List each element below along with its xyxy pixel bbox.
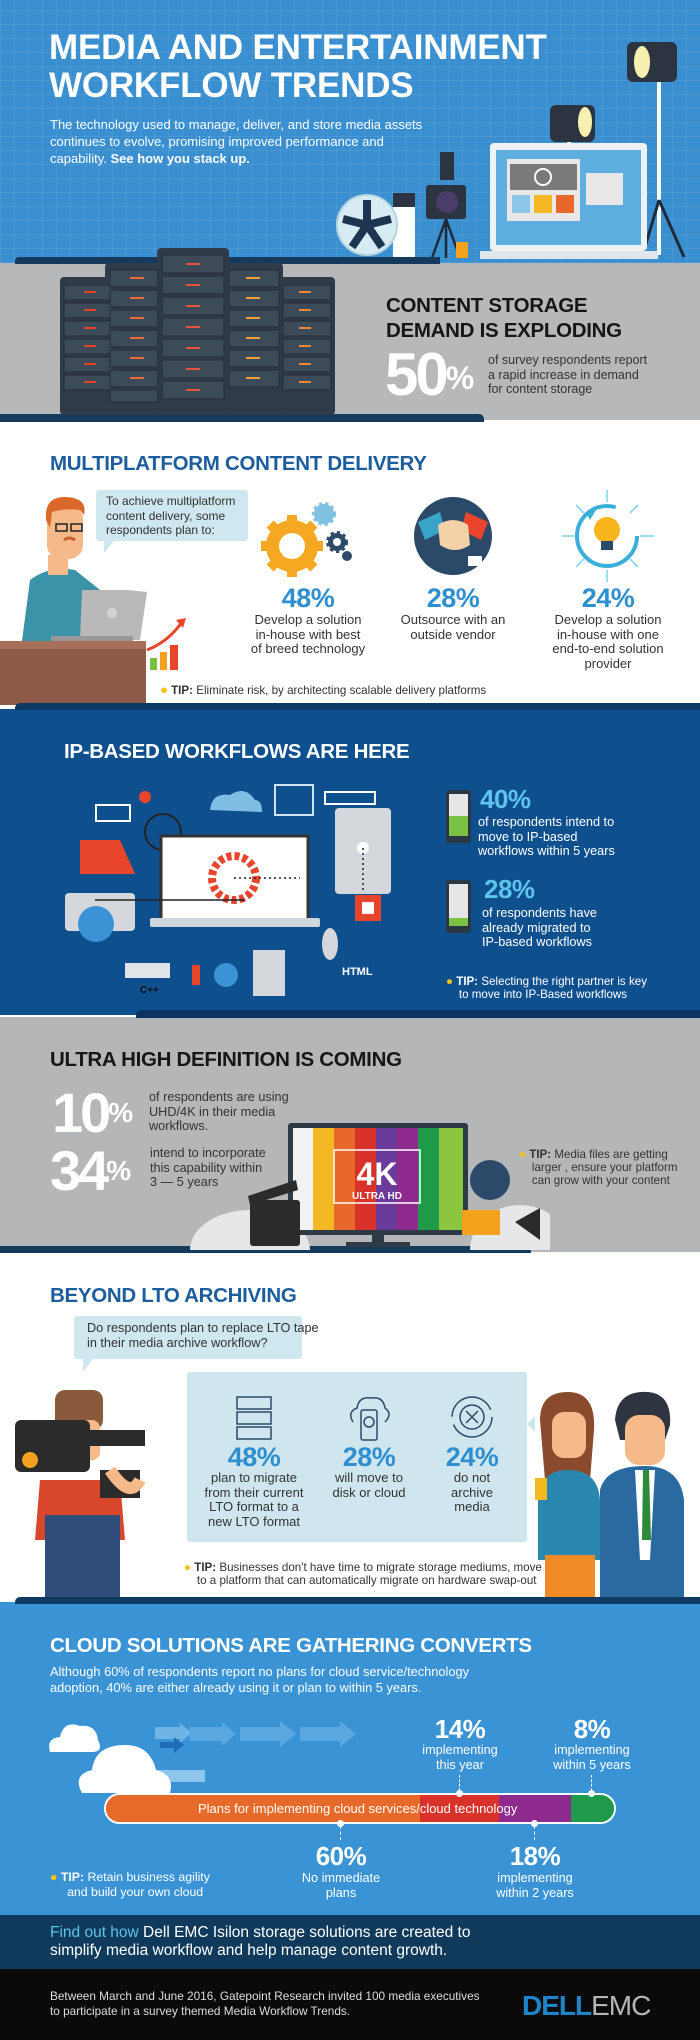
IP stat 40%: of respondents intend to xyxy=(478,815,614,829)
callout 18%: within 2 years xyxy=(496,1886,574,1900)
speech bubble: respondents plan to: xyxy=(106,523,215,537)
stat 28% xyxy=(332,1442,405,1500)
storage band xyxy=(0,263,700,420)
stat 24% xyxy=(446,1442,498,1514)
footer xyxy=(0,1969,700,2040)
stat 34% xyxy=(50,1139,266,1202)
stat: 48%: 48% xyxy=(282,583,334,613)
footer: Between March and June 2016, Gatepoint Research invited 100 media executives xyxy=(50,1989,480,2003)
stat 24%: archive xyxy=(451,1485,493,1500)
call to action band xyxy=(0,1915,700,1970)
tip: IP: ● TIP: Selecting the right partner is key xyxy=(446,975,647,988)
speech bubble: To achieve multiplatform xyxy=(106,494,235,508)
question bubble xyxy=(74,1316,302,1359)
callout 18%: 18% xyxy=(510,1841,560,1871)
callout 18%: implementing xyxy=(497,1871,573,1885)
tip: LTO xyxy=(184,1561,542,1587)
bar chart: cloud plans: Plans for implementing cloud services/cloud technology xyxy=(198,1801,517,1816)
callout 60%: plans xyxy=(326,1886,356,1900)
callout 14% xyxy=(422,1714,498,1797)
bar chart: cloud plans xyxy=(104,1793,616,1824)
stat: 28% xyxy=(401,583,505,642)
stat description: a rapid increase in demand xyxy=(488,368,639,382)
call to action band: Find out how Dell EMC Isilon storage solutions are created to xyxy=(50,1924,470,1941)
callout 8% xyxy=(553,1714,631,1797)
illustration: cameraman xyxy=(15,1359,146,1597)
callout 14%: this year xyxy=(436,1758,484,1772)
stat 28%: 28% xyxy=(343,1442,395,1472)
stat: 24%: provider xyxy=(585,656,631,671)
IP illustration: connected laptop: C++ xyxy=(140,985,159,996)
IP stat 40%: move to IP-based xyxy=(478,830,577,844)
stat 48%: from their current xyxy=(204,1485,303,1500)
tip: UHD: larger , ensure your platform xyxy=(532,1161,678,1174)
phone icon 2 xyxy=(446,880,471,933)
tip: LTO: ● TIP: Businesses don't have time to migrate storage mediums, move xyxy=(184,1561,542,1574)
tip: cloud: and build your own cloud xyxy=(67,1884,203,1898)
server racks illustration xyxy=(60,248,335,415)
stat 48%: 48% xyxy=(228,1442,280,1472)
stat 34%: 34% xyxy=(50,1139,128,1202)
stat 24%: media xyxy=(454,1499,490,1514)
callout 60%: No immediate xyxy=(302,1871,380,1885)
tip: multiplatform: ● TIP: Eliminate risk, by architecting scalable delivery platforms xyxy=(160,682,486,697)
stat description xyxy=(488,353,647,396)
stat description: for content storage xyxy=(488,382,592,396)
stat 34%: 3 — 5 years xyxy=(150,1175,218,1189)
stat 28%: will move to xyxy=(335,1470,403,1485)
tip: cloud: ● TIP: Retain business agility xyxy=(50,1870,210,1884)
storage heading xyxy=(386,294,622,342)
IP illustration: connected laptop xyxy=(65,784,391,996)
UHD section background xyxy=(0,1017,700,1252)
stat description: of survey respondents report xyxy=(488,353,647,367)
icon: server stack xyxy=(236,1396,272,1440)
stat: 24%: 24% xyxy=(582,583,634,613)
intro text: The technology used to manage, deliver, and store media assets xyxy=(50,117,422,132)
tip: UHD: ● TIP: Media files are getting xyxy=(519,1148,668,1161)
icon: handshake xyxy=(414,497,492,575)
storage heading: DEMAND IS EXPLODING xyxy=(386,319,622,342)
IP stat 40%: 40% xyxy=(480,784,531,814)
stat: 24%: in-house with one xyxy=(557,627,659,642)
4K TV illustration: 4K xyxy=(357,1156,397,1192)
IP stat 40% xyxy=(478,784,615,858)
icon: cloud disk xyxy=(350,1397,390,1441)
stat: 28%: Outsource with an xyxy=(401,612,505,627)
icon: gears xyxy=(261,502,352,577)
stat: 48%: in-house with best xyxy=(256,627,360,642)
stat: 48%: Develop a solution xyxy=(255,612,361,627)
stat: 24%: Develop a solution xyxy=(555,612,661,627)
title xyxy=(49,28,547,105)
cloud intro: adoption, 40% are either already using it or plan to within 5 years. xyxy=(50,1680,421,1694)
4K TV illustration: ULTRA HD xyxy=(352,1191,402,1202)
stat 10%: 10% xyxy=(52,1081,130,1144)
header background xyxy=(0,0,700,263)
stat 34%: this capability within xyxy=(150,1160,262,1174)
stat: 48%: of breed technology xyxy=(251,641,365,656)
speech bubble xyxy=(96,490,248,541)
stat: 28%: 28% xyxy=(427,583,479,613)
stat 10%: UHD/4K in their media xyxy=(149,1104,275,1118)
illustration: man at laptop xyxy=(0,497,186,705)
IP illustration: connected laptop: HTML xyxy=(342,966,373,978)
UHD heading: ULTRA HIGH DEFINITION IS COMING xyxy=(50,1048,402,1071)
intro text: capability. See how you stack up. xyxy=(50,151,250,166)
stat 28%: disk or cloud xyxy=(332,1485,405,1500)
illustration: reporters xyxy=(527,1392,684,1597)
callout 60% xyxy=(302,1820,380,1900)
stat: 48% xyxy=(251,583,366,656)
cloud heading: CLOUD SOLUTIONS ARE GATHERING CONVERTS xyxy=(50,1634,532,1657)
IP stat 28%: of respondents have xyxy=(482,906,597,920)
multiplatform heading: MULTIPLATFORM CONTENT DELIVERY xyxy=(50,452,427,475)
IP stat 28%: already migrated to xyxy=(482,920,591,934)
question bubble: Do respondents plan to replace LTO tape xyxy=(87,1321,319,1335)
stat 10%: workflows. xyxy=(149,1119,208,1133)
tip: IP: to move into IP-Based workflows xyxy=(459,988,627,1001)
header illustration: media equipment xyxy=(336,42,686,259)
stat 50%: 50% xyxy=(385,341,471,408)
4K TV illustration xyxy=(190,1123,550,1250)
IP stat 28% xyxy=(482,874,597,949)
tip: LTO: to a platform that can automatically migrate on hardware swap-out xyxy=(197,1574,536,1587)
footer: to participate in a survey themed Media Workflow Trends. xyxy=(50,2004,350,2018)
storage heading: CONTENT STORAGE xyxy=(386,294,587,317)
phone icon 1 xyxy=(446,790,471,843)
stat: 24% xyxy=(552,583,664,671)
stat 48% xyxy=(204,1442,304,1529)
stat: 24%: end-to-end solution xyxy=(552,641,664,656)
question bubble: in their media archive workflow? xyxy=(87,1336,268,1350)
IP stat 28%: IP-based workflows xyxy=(482,935,592,949)
stat 48%: plan to migrate xyxy=(211,1470,297,1485)
stat 48%: LTO format to a xyxy=(209,1499,299,1514)
callout 8%: within 5 years xyxy=(553,1758,631,1772)
LTO heading: BEYOND LTO ARCHIVING xyxy=(50,1284,296,1307)
title: WORKFLOW TRENDS xyxy=(49,66,413,105)
callout 8%: 8% xyxy=(574,1714,610,1744)
logo: DELLEMC xyxy=(522,1990,650,2021)
stat 10% xyxy=(52,1081,289,1144)
callout 14%: implementing xyxy=(422,1743,498,1757)
IP stat 28%: 28% xyxy=(484,874,535,904)
stat 24%: do not xyxy=(454,1470,490,1485)
intro text: continues to evolve, promising improved performance and xyxy=(50,134,384,149)
IP heading: IP-BASED WORKFLOWS ARE HERE xyxy=(64,740,409,763)
cloud intro xyxy=(50,1664,469,1694)
call to action band: simplify media workflow and help manage content growth. xyxy=(50,1942,447,1959)
tip: UHD: can grow with your content xyxy=(532,1174,670,1187)
icon: no archive xyxy=(451,1396,493,1438)
callout 14%: 14% xyxy=(435,1714,485,1744)
callout 60%: 60% xyxy=(316,1841,366,1871)
icon: lightbulb cycle xyxy=(562,490,654,582)
stat 24%: 24% xyxy=(446,1442,498,1472)
tip: cloud xyxy=(50,1870,210,1899)
stat 34%: intend to incorporate xyxy=(150,1146,266,1160)
cloud intro: Although 60% of respondents report no plans for cloud service/technology xyxy=(50,1664,469,1679)
tip: UHD xyxy=(519,1148,678,1187)
stat: 28%: outside vendor xyxy=(410,627,496,642)
callout 8%: implementing xyxy=(554,1743,630,1757)
speech bubble: content delivery, some xyxy=(106,508,225,522)
IP stat 40%: workflows within 5 years xyxy=(478,844,615,858)
cloud section background xyxy=(0,1602,700,1922)
illustration: clouds and arrows xyxy=(49,1721,356,1793)
title: MEDIA AND ENTERTAINMENT xyxy=(49,28,547,67)
callout 18% xyxy=(496,1820,574,1900)
stat 10%: of respondents are using xyxy=(149,1090,289,1104)
tip: IP xyxy=(446,975,647,1001)
IP section background xyxy=(0,709,700,1015)
answer panel xyxy=(187,1372,527,1542)
stat 48%: new LTO format xyxy=(208,1514,300,1529)
intro text xyxy=(50,117,422,166)
